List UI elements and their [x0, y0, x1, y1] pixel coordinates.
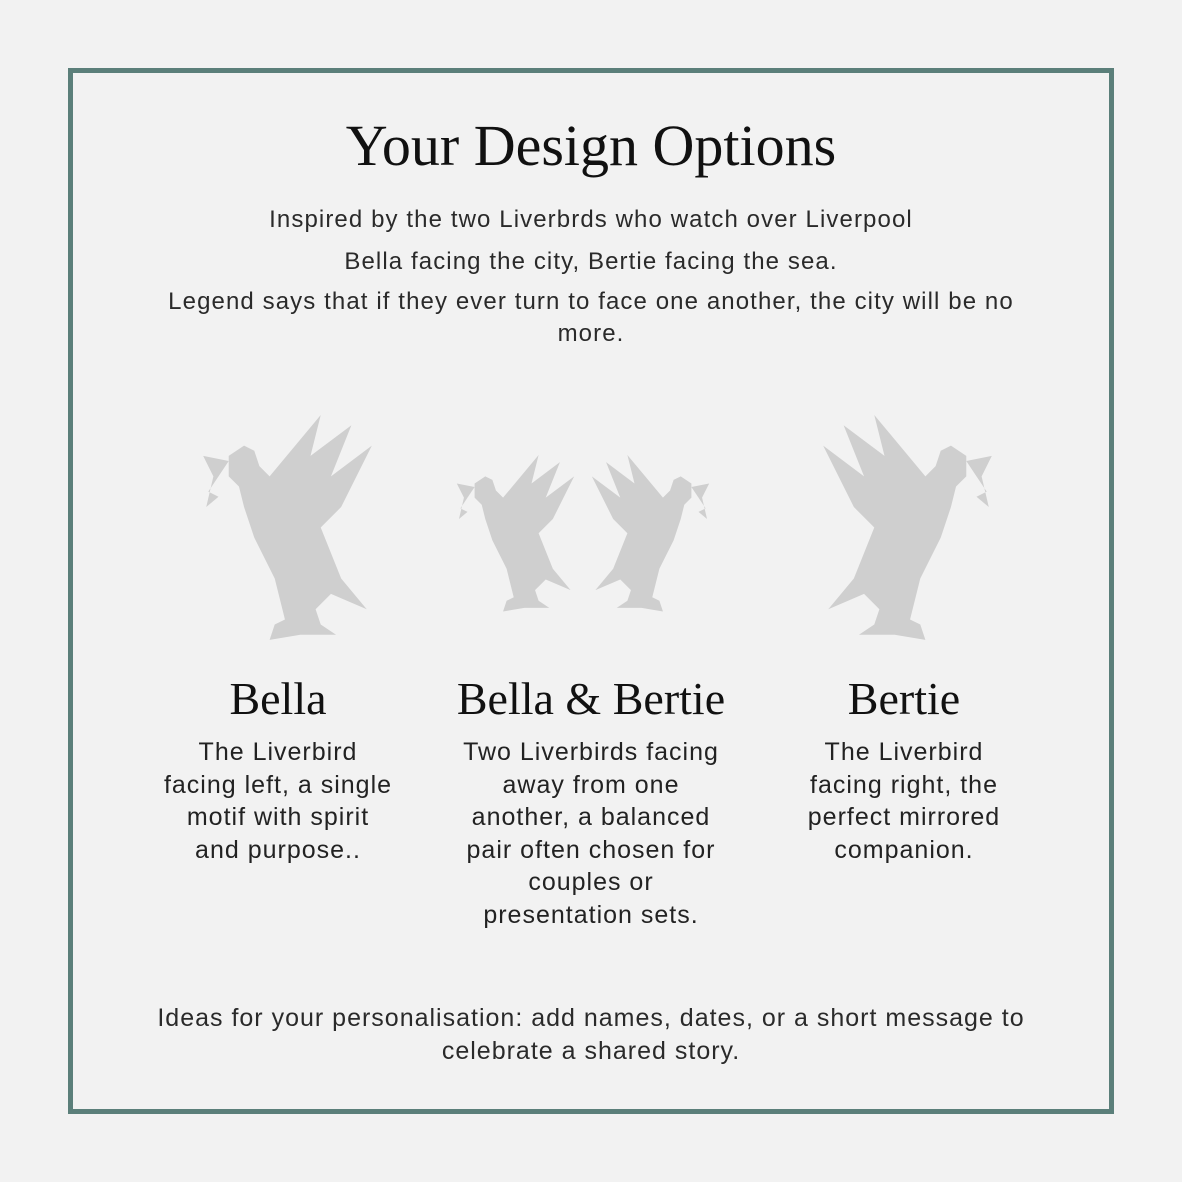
intro text: Legend says that if they ever turn to face one another, the city will be no more. — [168, 288, 1014, 347]
desc: Bella & Bertie: pair often chosen for — [467, 836, 715, 864]
desc: Bertie: The Liverbird — [825, 738, 983, 766]
intro text — [168, 206, 1014, 347]
bird: Bella — [203, 416, 372, 640]
desc: Bella: The Liverbird — [199, 738, 357, 766]
desc: Bella & Bertie: couples or — [528, 868, 654, 896]
desc: Bella & Bertie: Two Liverbirds facing — [463, 738, 719, 766]
desc: Bertie: facing right, the — [810, 770, 998, 798]
desc: Bertie: companion. — [834, 836, 974, 864]
footer text — [157, 1004, 1025, 1065]
desc: Bella: facing left, a single — [164, 770, 392, 798]
footer text: celebrate a shared story. — [442, 1037, 740, 1065]
footer text: Ideas for your personalisation: add names, dates, or a short message to — [157, 1004, 1025, 1032]
name: Bella: Bella — [229, 673, 327, 724]
frame — [68, 68, 1114, 1114]
intro text: Inspired by the two Liverbrds who watch over Liverpool — [269, 206, 913, 233]
desc: Bertie — [808, 738, 1000, 864]
desc: Bertie: perfect mirrored — [808, 803, 1000, 831]
birds: Bella & Bertie — [457, 456, 709, 612]
name: Bella & Bertie: Bella & Bertie — [457, 673, 725, 724]
desc: Bella & Bertie: another, a balanced — [472, 803, 710, 831]
desc: Bella: and purpose.. — [195, 836, 361, 864]
desc: Bella: motif with spirit — [187, 803, 369, 831]
desc: Bella & Bertie: away from one — [503, 770, 679, 798]
intro text: Bella facing the city, Bertie facing the sea. — [344, 248, 838, 275]
bird: Bertie — [824, 416, 992, 640]
desc: Bella & Bertie: presentation sets. — [483, 900, 699, 928]
desc: Bella & Bertie — [463, 738, 719, 928]
desc: Bella — [164, 738, 392, 864]
title: Your Design Options — [346, 113, 836, 178]
name: Bertie: Bertie — [848, 673, 960, 724]
